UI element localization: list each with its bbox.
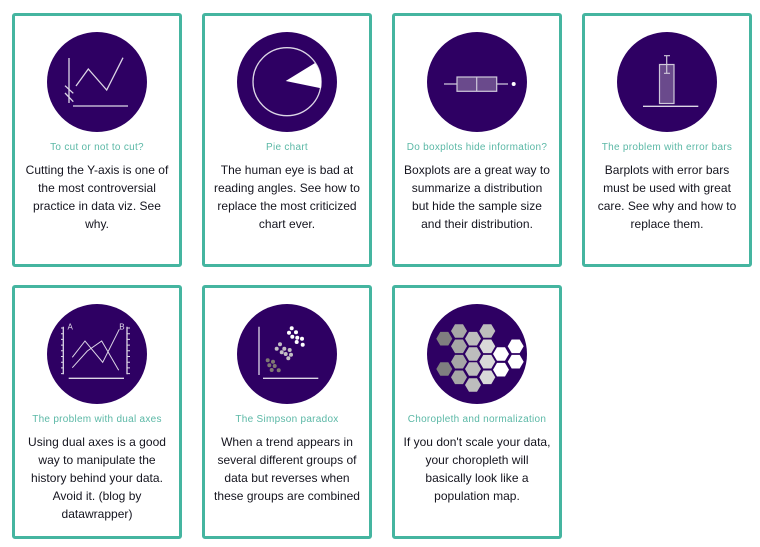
- text: choropleth description: population map.: [434, 489, 520, 503]
- panel: to cut or not to cut: [12, 13, 182, 267]
- icon: cut axis line chart: [47, 32, 147, 132]
- title: error bars: The problem with error bars: [602, 142, 732, 153]
- text: choropleth description: If you don't scale your data,: [404, 435, 550, 449]
- title: to cut or not to cut: To cut or not to cut?: [50, 142, 144, 153]
- title: choropleth: Choropleth and normalization: [408, 414, 546, 425]
- icon: pie chart: [237, 32, 337, 132]
- text: cut description: practice in data viz. See: [33, 199, 161, 213]
- title: dual axes: The problem with dual axes: [32, 414, 162, 425]
- icon: dual axes chart: B: [119, 322, 125, 332]
- text: dual axes description: history behind your data.: [31, 471, 163, 485]
- text: boxplot description: Boxplots are a great way to: [404, 163, 550, 177]
- panel: boxplots: [392, 13, 562, 267]
- text: pie description: [214, 163, 360, 231]
- title: boxplots: Do boxplots hide information?: [407, 142, 547, 153]
- text: dual axes description: [28, 435, 166, 521]
- text: choropleth description: basically look like a: [425, 471, 529, 485]
- panel: dual axes: [12, 285, 182, 539]
- text: Simpson description: data but reverses when: [224, 471, 350, 485]
- icon: bar with error bar: [617, 32, 717, 132]
- text: dual axes description: datawrapper): [62, 507, 132, 521]
- text: dual axes description: way to manipulate the: [38, 453, 156, 467]
- icon: grouped scatter plot: [237, 304, 337, 404]
- text: pie description: The human eye is bad at: [221, 163, 353, 177]
- title: pie chart: Pie chart: [266, 142, 308, 153]
- text: Simpson description: several different groups of: [217, 453, 357, 467]
- icon: hexagon choropleth map: [427, 304, 527, 404]
- text: choropleth description: your choropleth will: [425, 453, 529, 467]
- panel: pie chart: [202, 13, 372, 267]
- panel: Simpson paradox: [202, 285, 372, 539]
- text: boxplot description: summarize a distribution: [412, 181, 542, 195]
- text: Simpson description: these groups are combined: [214, 489, 360, 503]
- text: Simpson description: When a trend appears in: [221, 435, 353, 449]
- text: choropleth description: [404, 435, 550, 503]
- text: Simpson description: [214, 435, 360, 503]
- text: cut description: [26, 163, 168, 231]
- panel: error bars: [582, 13, 752, 267]
- icon: boxplot: [427, 32, 527, 132]
- text: boxplot description: but hide the sample size: [412, 199, 542, 213]
- text: cut description: the most controversial: [38, 181, 156, 195]
- text: pie description: reading angles. See how to: [214, 181, 360, 195]
- title: Simpson paradox: The Simpson paradox: [235, 414, 339, 425]
- panel: choropleth: [392, 285, 562, 539]
- icon: dual axes chart: [47, 304, 147, 404]
- text: boxplot description: [404, 163, 550, 231]
- text: dual axes description: Avoid it. (blog by: [53, 489, 141, 503]
- icon: dual axes chart: A: [68, 322, 74, 332]
- text: error bars description: Barplots with error bars: [605, 163, 729, 177]
- text: cut description: why.: [85, 217, 109, 231]
- text: error bars description: must be used with great: [603, 181, 731, 195]
- text: error bars description: replace them.: [631, 217, 703, 231]
- text: boxplot description: and their distribution.: [421, 217, 533, 231]
- text: error bars description: care. See why and how to: [598, 199, 736, 213]
- text: pie description: chart ever.: [259, 217, 315, 231]
- text: dual axes description: Using dual axes is a good: [28, 435, 166, 449]
- text: pie description: replace the most criticized: [217, 199, 357, 213]
- text: cut description: Cutting the Y-axis is one of: [26, 163, 168, 177]
- text: error bars description: [598, 163, 736, 231]
